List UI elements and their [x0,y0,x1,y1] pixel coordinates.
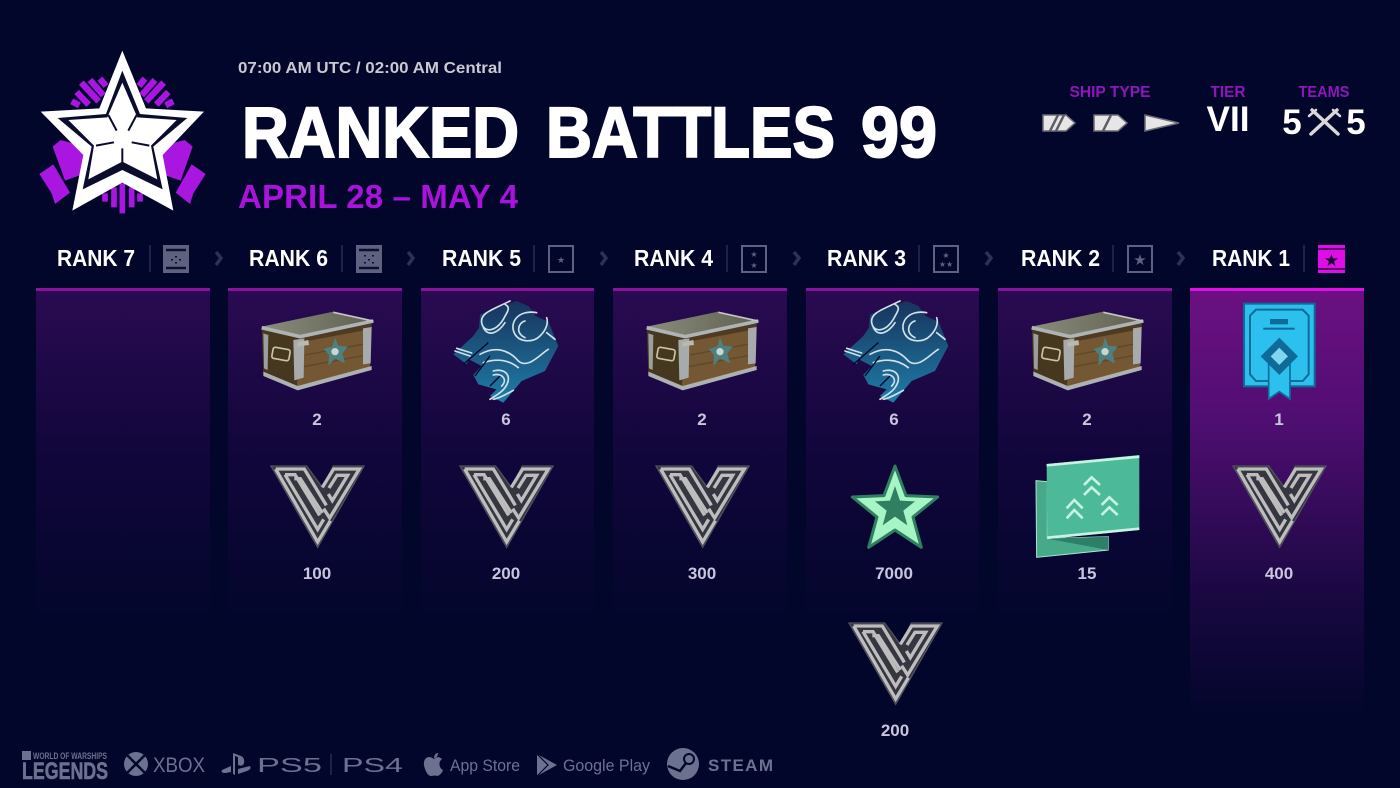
panel: rank 5 [421,288,594,640]
icon: steel [1233,466,1326,547]
rank 1 header [1212,245,1345,273]
rank 4 header [634,245,766,272]
logo: google play: Google Play [563,756,650,775]
logo: legends: WORLD OF WARSHIPS [33,751,107,761]
arrow [216,252,221,265]
rank 2 header [1021,245,1152,272]
rank 5 header: RANK 5 [442,245,521,271]
rank 4 header: ★ [750,250,758,259]
logo star ring [58,71,187,189]
rank 7 header: RANK 7 [57,245,135,271]
icon: certificate [1244,304,1315,399]
rank 6 header: RANK 6 [249,245,328,271]
icon: destroyer [1145,115,1179,131]
rank header row [57,245,1345,273]
arrow [986,252,991,265]
icon: container [262,312,373,390]
icon: cruiser [1094,115,1127,131]
rank 1 header: ★ [1324,251,1339,270]
footer platform logos [22,748,773,785]
panel: rank 3 [806,288,979,740]
tier value: VII [1206,100,1250,139]
icon: steel [271,466,364,547]
logo: steam [667,748,773,780]
rank 1 header: RANK 1 [1212,245,1290,271]
icon: camouflage [453,301,558,403]
time line: 07:00 AM UTC / 02:00 AM Central [238,60,502,77]
ship type block [1043,84,1179,131]
icon: crossed swords [1309,110,1340,134]
logo ribbons [39,140,206,204]
logo star outer [41,51,204,211]
logo: playstation: PS4 [342,755,403,777]
count: 2 [697,410,707,429]
rank 4 header: RANK 4 [634,245,713,271]
arrow [408,252,413,265]
panel: rank 7 [36,288,210,640]
icon: container [647,312,758,390]
logo hatch: upper right [139,79,173,105]
count: 1 [1274,410,1284,429]
title: BATTLES [546,94,835,173]
teams block [1282,84,1366,142]
icon: battleship [1043,115,1075,131]
title: 99 [861,94,937,173]
panel: rank 1 [1190,288,1364,723]
logo: legends: LEGENDS [22,758,108,785]
ship type label: SHIP TYPE [1070,84,1151,101]
count: 6 [889,410,899,429]
logo hatch: bottom [105,183,140,213]
arrow [601,252,606,265]
panel: rank 4 [613,288,787,640]
teams left: 5 [1282,103,1302,142]
panel: rank 2 [998,288,1172,640]
count: 7000 [875,564,913,583]
logo: playstation [222,753,403,777]
count: 200 [881,721,909,740]
count: 200 [492,564,520,583]
logo: legends [22,751,108,785]
count: 6 [501,410,511,429]
rank 4 header: ★ [750,261,758,270]
count: 300 [688,564,716,583]
logo: xbox [124,752,205,777]
icon: steel [460,466,553,547]
logo: xbox: XBOX [153,754,205,777]
logo: ranked star emblem [39,51,206,213]
rank 5 header: ★ [557,255,565,265]
rank 2 header: RANK 2 [1021,245,1100,271]
teams right: 5 [1346,103,1366,142]
logo star inner [68,83,177,179]
teams label: TEAMS [1298,84,1350,101]
rank 5 header [442,245,573,272]
logo: playstation: PS5 [257,755,322,777]
panel: rank 6 [228,288,402,640]
count: 2 [1082,410,1092,429]
icon: camouflage [843,301,948,403]
rank 2 header: ★ [1133,252,1147,269]
icon: free xp star [852,466,938,547]
logo: google play [537,754,650,776]
rank 3 header: ★★ [939,260,953,269]
count: 100 [303,564,331,583]
tier block [1206,84,1250,139]
icon: steel [849,623,942,704]
tier label: TIER [1210,84,1246,101]
count: 15 [1078,564,1096,583]
rank 6 header [249,245,382,273]
logo: app store [424,753,520,776]
rank 3 header: RANK 3 [827,245,906,271]
arrow [1178,252,1183,265]
logo hatch: upper left [72,79,106,105]
count: 2 [312,410,322,429]
date range: APRIL 28 – MAY 4 [238,178,519,215]
logo: app store: App Store [450,756,520,775]
arrow [794,252,799,265]
title [242,94,937,173]
rank 3 header: ★ [942,251,950,260]
icon: steel [656,466,749,547]
title: RANKED [242,94,519,173]
icon: signal flags [1036,455,1139,557]
logo: steam: STEAM [708,756,773,775]
rank 7 header [57,245,189,273]
rank 3 header [827,245,958,272]
count: 400 [1265,564,1293,583]
icon: container [1032,312,1143,390]
